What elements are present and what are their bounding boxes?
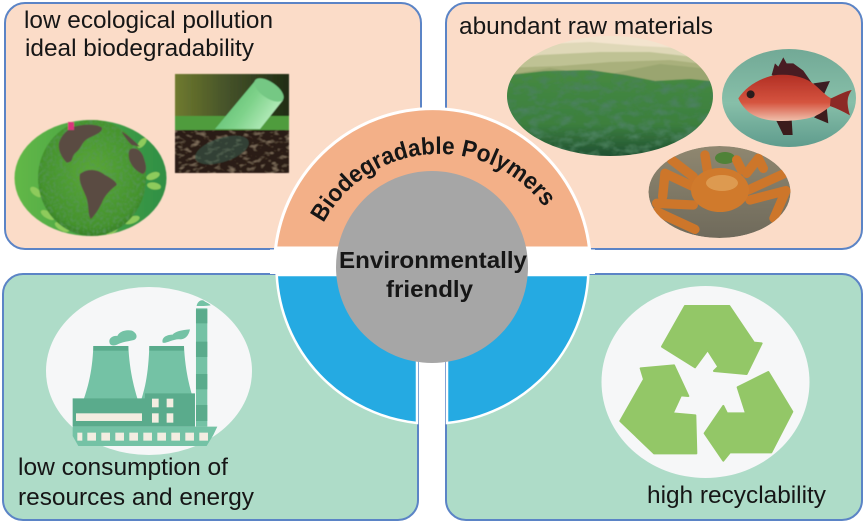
center diagram: environmentally friendly	[270, 108, 595, 424]
caption: low consumption of resources and energy: resources and energy	[18, 484, 254, 511]
blue arc right	[447, 275, 588, 423]
panel: low ecological pollution	[5, 3, 421, 249]
peach arc: biodegradable polymers	[276, 109, 589, 248]
panel: low consumption of resources and energy	[3, 274, 418, 520]
panel: abundant raw materials	[446, 3, 862, 249]
bag roll	[215, 81, 283, 129]
heading: low ecological pollution, ideal biodegradability	[24, 7, 273, 62]
image: red fish	[722, 49, 856, 147]
blue arc left	[277, 275, 417, 423]
panel: high recyclability	[446, 274, 862, 520]
icon: recycling arrows	[602, 286, 810, 478]
center label: Environmentally friendly: Environmentally	[339, 247, 527, 273]
caption: low consumption of resources and energy: low consumption of	[18, 454, 228, 481]
caption: low consumption of resources and energy	[18, 454, 254, 511]
heading: low ecological pollution, ideal biodegradability: low ecological pollution	[24, 7, 273, 34]
image: green globe	[14, 120, 166, 237]
image: king crab	[648, 146, 790, 238]
heading: low ecological pollution, ideal biodegradability: ideal biodegradability	[25, 35, 254, 62]
center label: Environmentally friendly	[339, 247, 527, 302]
white gap	[270, 250, 595, 274]
caption: high recyclability: high recyclability	[647, 482, 826, 509]
image: biodegradable bag in soil	[175, 74, 289, 173]
image: forest hills	[507, 41, 713, 156]
icon: factory	[46, 287, 252, 455]
heading: abundant raw materials: abundant raw materials	[459, 13, 713, 40]
curved title: Biodegradable Polymers: Biodegradable Polymers	[310, 136, 552, 222]
continents	[59, 125, 146, 219]
center label: Environmentally friendly: friendly	[386, 276, 473, 302]
grey center circle	[336, 171, 528, 363]
